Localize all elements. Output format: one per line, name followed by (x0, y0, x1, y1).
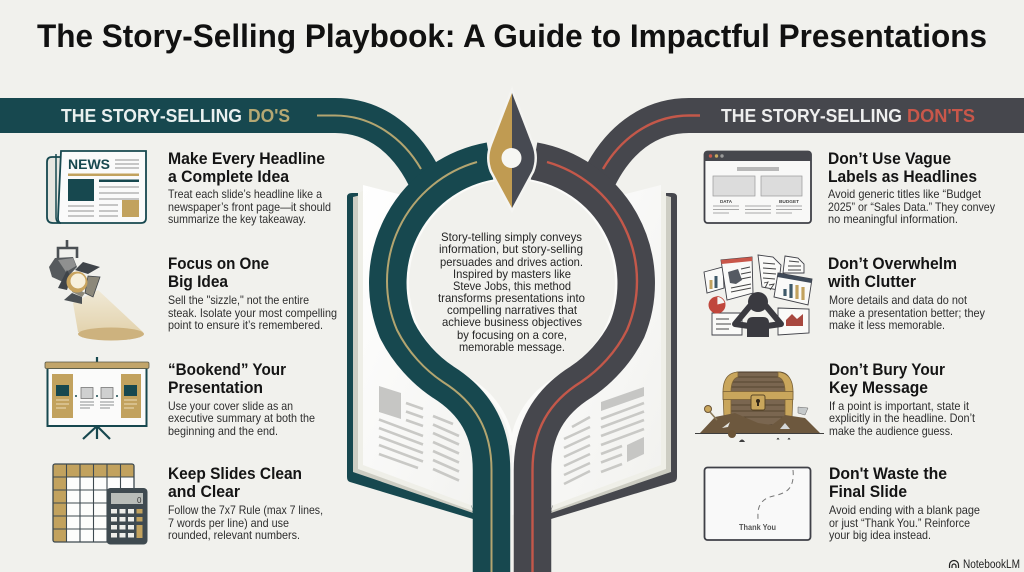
item: clean slides: rounded, relevant numbers. (168, 529, 300, 542)
item: vague labels: Don’t Use Vague (828, 150, 951, 168)
item: key message: Don’t Bury Your (829, 361, 946, 379)
item: clutter: with Clutter (827, 273, 917, 291)
icon: spreadsheet and calculator (53, 464, 148, 544)
compass needle (490, 93, 534, 208)
central text: memorable message. (459, 340, 565, 354)
item: vague labels: no meaningful information. (828, 213, 958, 226)
item: clean slides: and Clear (168, 483, 241, 501)
open book (347, 185, 677, 519)
item: vague labels (828, 150, 995, 226)
item: one big idea: Big Idea (168, 273, 229, 291)
item: clutter: Don’t Overwhelm (828, 255, 957, 273)
teal do's road (0, 116, 492, 572)
item: headline: a Complete Idea (168, 168, 290, 186)
item: one big idea: steak. Isolate your most compelling (168, 307, 337, 320)
right book half (512, 185, 677, 519)
item: clutter (827, 255, 985, 332)
charcoal don'ts road (532, 116, 1024, 572)
do's heading: THE STORY-SELLING (61, 105, 242, 126)
panel: do's list (45, 150, 337, 544)
don'ts heading: DON'TS (907, 105, 975, 126)
central circle panel (407, 178, 617, 445)
item: clutter: More details and data do not (829, 294, 968, 307)
item: bookend: Presentation (168, 379, 263, 397)
icon: browser slide: DATA (720, 199, 732, 205)
icon: blank final slide (704, 468, 810, 540)
item: one big idea (168, 255, 337, 332)
icon: newspaper: NEWS (68, 156, 110, 172)
item: bookend: Use your cover slide as an (168, 400, 293, 413)
item: bookend (168, 361, 315, 438)
item: key message: explicitly in the headline. Don’t (829, 412, 976, 425)
central text: Story-telling simply conveys (441, 230, 582, 244)
item: clean slides: Keep Slides Clean (168, 465, 302, 483)
item: final slide (829, 465, 980, 542)
icon: newspaper (47, 151, 146, 223)
panel: don'ts list (695, 150, 995, 542)
item: final slide: or just “Thank You.” Reinforce (829, 517, 970, 530)
item: clean slides: 7 words per line) and use (168, 517, 289, 530)
icon: blank final slide: Thank You (739, 523, 776, 532)
item: clean slides (168, 465, 323, 542)
item: clean slides: Follow the 7x7 Rule (max 7 lines, (168, 504, 323, 517)
item: one big idea: Sell the "sizzle," not the entire (168, 294, 309, 307)
item: bookend: executive summary at both the (168, 412, 315, 425)
item: bookend: “Bookend” Your (168, 361, 287, 379)
item: headline (168, 150, 331, 226)
do's heading: DO'S (248, 105, 290, 126)
icon: spotlight (49, 240, 144, 340)
central text: transforms presentations into (438, 291, 585, 305)
icon: projection screen (45, 357, 149, 439)
item: vague labels: 2025” or “Sales Data.” They convey (828, 201, 995, 214)
icon: spreadsheet and calculator: 0 (137, 496, 142, 505)
item: key message: Key Message (829, 379, 928, 397)
central text: Steve Jobs, this method (453, 279, 571, 293)
icon: browser slide (704, 151, 811, 223)
item: final slide: Avoid ending with a blank page (829, 504, 980, 517)
item: clutter: make a presentation better; they (829, 307, 985, 320)
item: one big idea: Focus on One (168, 255, 269, 273)
title: The Story-Selling Playbook: A Guide to Impactful Presentations (37, 18, 987, 54)
item: final slide: Final Slide (829, 483, 907, 501)
item: key message: make the audience guess. (829, 425, 953, 438)
item: headline: summarize the key takeaway. (168, 213, 306, 226)
item: vague labels: Avoid generic titles like “Budget (828, 188, 982, 201)
item: headline: Treat each slide’s headline like a (168, 188, 322, 201)
left book half (347, 185, 512, 519)
item: bookend: beginning and the end. (168, 425, 278, 438)
central text: Inspired by masters like (453, 267, 571, 281)
item: one big idea: point to ensure it’s remembered. (168, 319, 323, 332)
item: key message (829, 361, 976, 438)
icon: buried treasure chest (695, 372, 824, 442)
central text (438, 230, 585, 354)
central text: achieve business objectives (442, 315, 582, 329)
central text: persuades and drives action. (440, 255, 583, 269)
central text: by focusing on a core, (457, 328, 567, 342)
icon: overwhelmed person with documents (704, 255, 812, 337)
item: headline: Make Every Headline (168, 150, 325, 168)
item: final slide: Don't Waste the (829, 465, 947, 483)
item: vague labels: Labels as Headlines (828, 168, 977, 186)
item: clutter: make it less memorable. (829, 319, 945, 332)
don'ts heading: THE STORY-SELLING (721, 105, 902, 126)
icon: browser slide: BUDGET (779, 199, 799, 205)
central text: information, but story-selling (439, 242, 583, 256)
central text: compelling narratives that (447, 303, 578, 317)
item: key message: If a point is important, state it (829, 400, 970, 413)
item: headline: newspaper’s front page—it should (168, 201, 331, 214)
item: final slide: your big idea instead. (829, 529, 931, 542)
